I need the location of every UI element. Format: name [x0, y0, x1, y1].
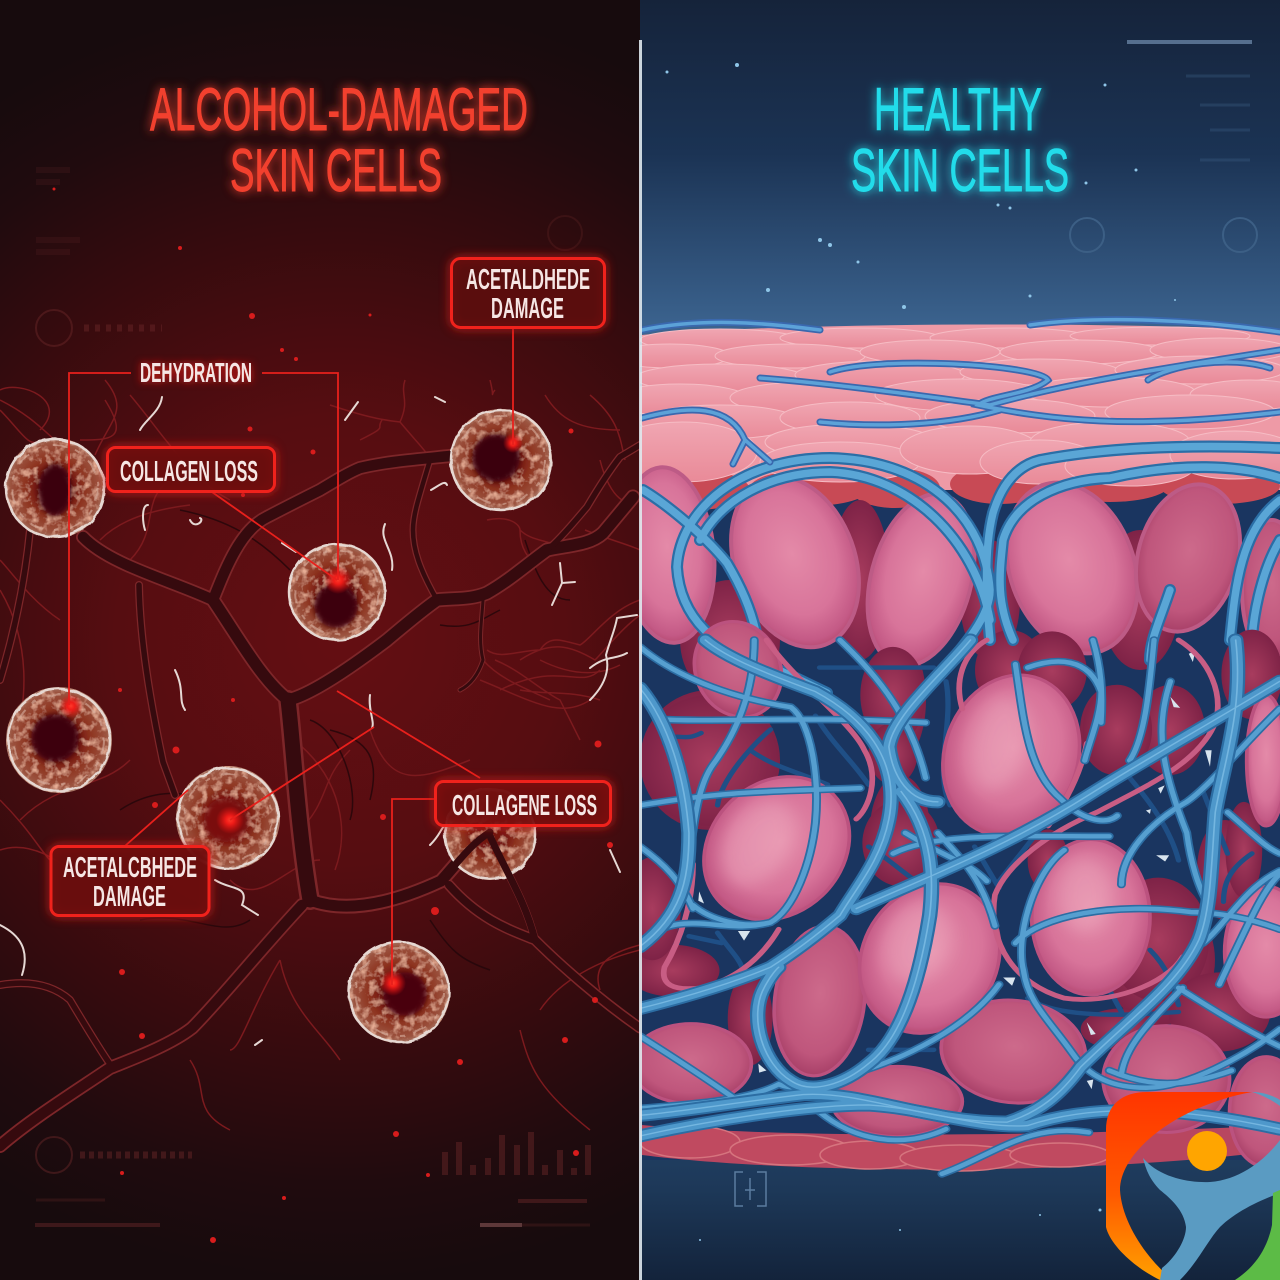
faint HUD decorations — [35, 170, 590, 1225]
title: alcohol-damaged — [150, 76, 528, 204]
cell — [176, 766, 280, 870]
branch crossing the partly hidden cell — [441, 832, 535, 940]
panel: healthy skin cells — [607, 0, 1280, 1280]
tangled dermal fibres and cells, traced in crop coordinates — [624, 615, 1280, 1174]
callout leader lines — [69, 328, 513, 985]
dark capillaries — [120, 510, 570, 970]
cell — [444, 788, 536, 880]
foreground skin cells — [631, 615, 1280, 1167]
callout: collagene loss: COLLAGENE LOSS — [452, 790, 597, 822]
red particles — [52, 188, 613, 1243]
panel: alcohol-damaged skin cells — [0, 0, 640, 1280]
dermal matrix background — [642, 480, 1280, 1160]
back pink cells in upper row — [640, 500, 1253, 1025]
title: alcohol-damaged: SKIN CELLS — [230, 137, 442, 204]
cell — [348, 941, 450, 1043]
logo figure: blue — [1143, 1140, 1280, 1280]
centre divider — [639, 40, 642, 1280]
logo swoosh: green — [1235, 1190, 1280, 1280]
callout: acetalcbhede damage: ACETALCBHEDE — [63, 852, 197, 884]
cell — [288, 543, 386, 641]
title: healthy skin cells — [851, 76, 1069, 204]
logo swoosh: top right — [1252, 1092, 1280, 1106]
particles and HUD decorations — [666, 42, 1257, 1241]
logo — [1106, 1092, 1280, 1280]
callout: acetaldhede damage — [452, 258, 604, 328]
title: alcohol-damaged: ALCOHOL-DAMAGED — [150, 76, 528, 143]
thin red capillaries — [0, 380, 640, 1130]
cell — [6, 687, 112, 793]
logo swoosh: red-orange — [1106, 1092, 1252, 1280]
upper blue fibres — [643, 446, 1280, 700]
pink fibres — [664, 640, 1218, 1000]
callout: acetalcbhede damage: DAMAGE — [93, 881, 166, 913]
callout: collagene loss — [436, 782, 610, 826]
dark back fibres — [664, 668, 1252, 1050]
title: healthy skin cells: SKIN CELLS — [851, 137, 1069, 204]
cell — [5, 438, 105, 538]
surface blue fibres — [642, 320, 1280, 464]
label: dehydration: DEHYDRATION — [140, 357, 252, 388]
callout: acetaldhede damage: ACETALDHEDE — [466, 264, 590, 296]
callout: acetalcbhede damage — [51, 846, 209, 916]
white fibre fragments — [0, 397, 637, 1045]
cell — [450, 409, 552, 511]
callout: acetaldhede damage: DAMAGE — [491, 293, 564, 325]
branching blood vessels — [0, 445, 640, 1146]
upper skin cells — [640, 465, 1280, 666]
scale undersides — [692, 470, 1280, 510]
logo dot — [1187, 1131, 1227, 1171]
blue fibres: thick — [640, 640, 1280, 1136]
title: healthy skin cells: HEALTHY — [874, 76, 1042, 143]
cell highlights — [707, 692, 1113, 990]
bottom skin layer — [640, 1125, 1280, 1171]
callout: collagen loss — [108, 448, 274, 492]
callout: collagen loss: COLLAGEN LOSS — [120, 456, 258, 488]
overlapping scales — [607, 327, 1280, 486]
deep dark-pink cells — [624, 630, 1280, 1065]
blue fibres: thin — [640, 640, 1280, 1174]
white gaps between fibres — [698, 651, 1212, 1089]
skin surface layer of scales — [607, 325, 1280, 510]
